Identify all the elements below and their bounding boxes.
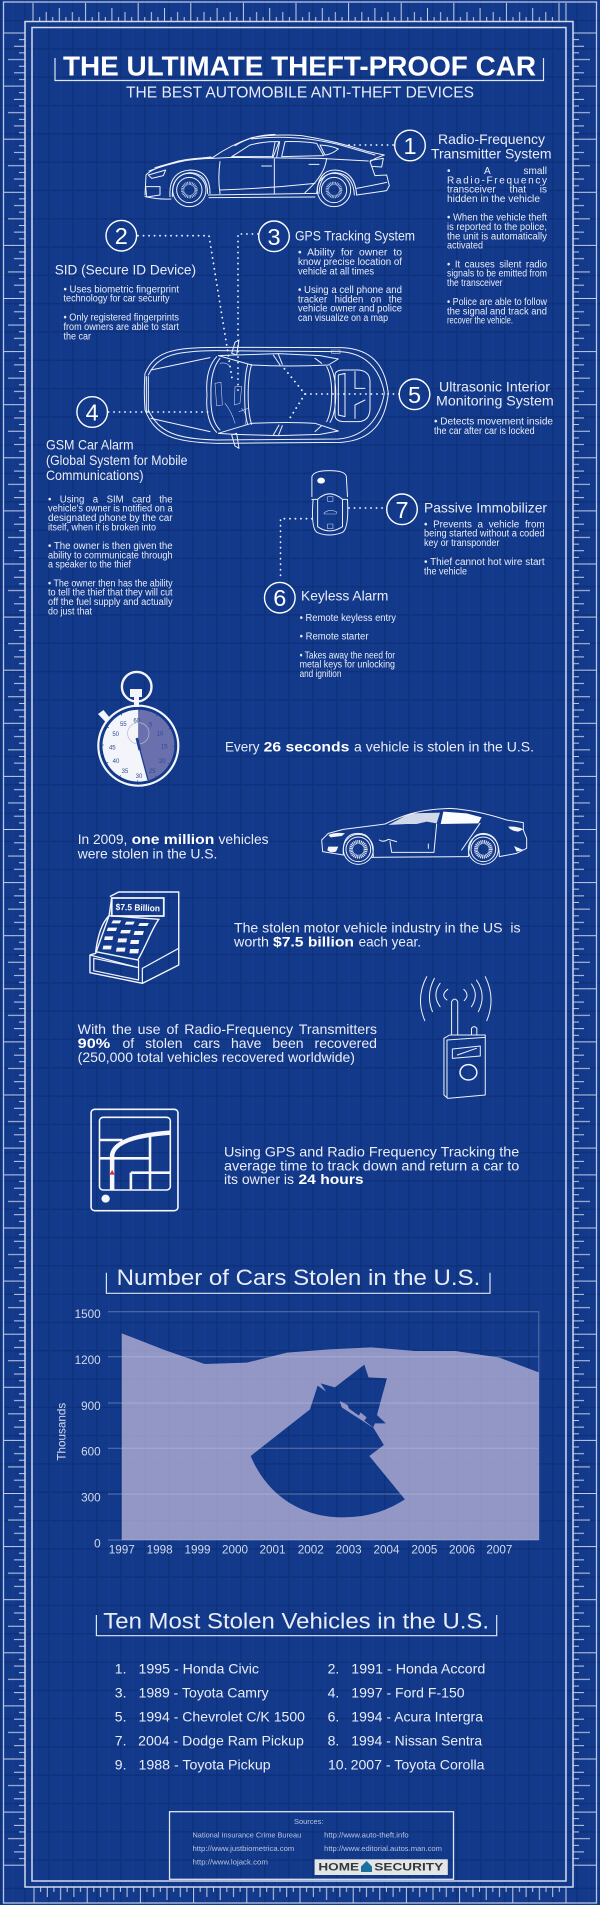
stat: 26 seconds: Every	[225, 739, 260, 755]
stat: one million vehicles: were stolen in the U.S.	[77, 845, 217, 861]
body text 3	[298, 248, 402, 324]
x axis labels: 2003	[336, 1543, 362, 1556]
sources text: http://www.auto-theft.info	[324, 1830, 409, 1839]
body text 1: the transceiver	[447, 278, 503, 289]
icon: stopwatch: 25	[149, 769, 156, 775]
y axis labels: 0	[94, 1537, 101, 1550]
body text 7: key or transponder	[424, 538, 500, 549]
list: ten most stolen vehicles: 7.	[115, 1732, 126, 1748]
body text 6: • Remote keyless entry	[300, 613, 396, 624]
y axis labels	[75, 1308, 101, 1550]
x axis labels: 1999	[184, 1543, 211, 1556]
body text 3: vehicle owner and police	[298, 304, 402, 315]
area chart: cars stolen	[56, 1308, 539, 1556]
body text 2	[64, 284, 179, 342]
heading 6: Keyless Alarm	[301, 588, 388, 604]
list: ten most stolen vehicles: 6.	[328, 1708, 339, 1724]
icon: sports car side view	[322, 808, 527, 864]
icon: stopwatch: 45	[109, 745, 116, 751]
gridlines	[108, 1312, 539, 1540]
callout 1: radio-frequency transmitter	[349, 130, 552, 327]
heading 4: GSM Car Alarm	[46, 436, 134, 452]
body text 4: to tell the thief that they will cut	[48, 588, 173, 599]
body text 1: small	[524, 166, 547, 177]
stat: 7.5 billion: each year.	[359, 934, 421, 950]
connector	[138, 236, 232, 378]
list: ten most stolen vehicles: 2004 - Dodge Ram Pickup	[138, 1732, 304, 1748]
body text 4: ability to communicate through	[48, 550, 173, 561]
heading 1	[431, 131, 552, 162]
body text 1: Radio-Frequency	[447, 175, 547, 186]
number badge 5	[399, 379, 430, 410]
stat: 24 hours: its owner is	[224, 1171, 294, 1187]
list: ten most stolen vehicles: 5.	[115, 1708, 126, 1724]
stat: 24 hours	[224, 1144, 520, 1187]
connector	[349, 144, 394, 146]
stat: 26 seconds: 26 seconds	[264, 739, 350, 755]
icon: stopwatch: 20	[159, 759, 166, 765]
body text 1: recover the vehicle.	[447, 316, 513, 327]
body text 2: • Uses biometric fingerprint	[64, 284, 179, 295]
body text 7: being started without a coded	[424, 529, 545, 540]
body text 4: • The owner is then given the	[48, 541, 173, 552]
stat: one million vehicles: In 2009,	[78, 831, 127, 847]
body text 4: do just that	[48, 606, 92, 617]
icon: stopwatch: 60	[133, 718, 141, 724]
logo: home security	[315, 1859, 448, 1875]
body text 2: • Only registered fingerprints	[64, 313, 179, 324]
icon: stopwatch: 55	[120, 722, 127, 728]
list: ten most stolen vehicles: 1997 - Ford F-150	[351, 1684, 465, 1700]
icon: stopwatch: 40	[113, 759, 120, 765]
number badge 4: 4	[86, 400, 99, 426]
title: THE ULTIMATE THEFT-PROOF CAR	[63, 50, 536, 82]
y axis labels: 600	[81, 1446, 101, 1459]
number badge 5: 5	[408, 382, 421, 408]
logo: home security: HOME	[318, 1862, 359, 1874]
sources text: http://www.editorial.autos.man.com	[324, 1844, 442, 1853]
body text 1: signals to be emitted from	[447, 269, 547, 280]
body text 7: the vehicle	[424, 566, 467, 577]
stat: 90 percent recovered	[78, 1021, 377, 1065]
number badge 6	[264, 582, 295, 613]
stat: 7.5 billion: $7.5 billion	[273, 934, 354, 950]
y axis title: Thousands	[56, 1403, 68, 1461]
connector	[280, 519, 312, 578]
icon: stopwatch: 30	[136, 774, 143, 780]
body text 3: • Ability for owner to	[298, 248, 402, 259]
list: ten most stolen vehicles: 4.	[328, 1684, 339, 1700]
heading 4	[46, 436, 188, 483]
heading 1: Transmitter System	[431, 146, 552, 162]
x axis labels: 2006	[449, 1543, 475, 1556]
heading 1: Radio-Frequency	[438, 131, 545, 147]
list: ten most stolen vehicles: 9.	[115, 1756, 126, 1772]
x axis labels	[109, 1543, 512, 1556]
stat: 90 percent recovered: of stolen cars have been recovered	[122, 1035, 377, 1051]
body text 4: vehicle's owner is notified on a	[48, 504, 173, 515]
stat: 24 hours: Using GPS and Radio Frequency Tracking the	[224, 1144, 520, 1160]
body text 1	[447, 166, 548, 327]
body text 4: itself, when it is broken into	[48, 522, 156, 533]
stat: 7.5 billion: worth	[233, 934, 269, 950]
number badge 3	[259, 221, 289, 252]
heading 2: SID (Secure ID Device)	[55, 261, 196, 277]
y axis labels: 1500	[75, 1308, 101, 1321]
body text 1: the unit is automatically	[447, 231, 547, 242]
list: ten most stolen vehicles: 1989 - Toyota Camry	[138, 1684, 269, 1700]
list: ten most stolen vehicles: 2007 - Toyota Corolla	[351, 1756, 485, 1772]
y axis labels: 900	[81, 1400, 101, 1413]
body text 4: designated phone by the car	[48, 513, 173, 524]
icon: stopwatch: 35	[122, 769, 129, 775]
stat: 7.5 billion	[233, 920, 520, 950]
sources text	[192, 1817, 442, 1866]
body text 3: • Using a cell phone and	[298, 285, 402, 296]
car side view illustration	[145, 134, 389, 207]
body text 4: a speaker to the thief	[48, 560, 131, 571]
body text 3: vehicle at all times	[298, 266, 374, 277]
body text 1: activated	[447, 241, 483, 252]
callout 5: ultrasonic interior monitoring	[283, 367, 554, 437]
icon: cash register	[90, 892, 179, 983]
connector	[238, 234, 258, 393]
number badge 1: 1	[403, 133, 417, 159]
list: ten most stolen vehicles: 10.	[328, 1756, 347, 1772]
body text 7: • Prevents a vehicle from	[424, 519, 545, 530]
callout 7: passive immobilizer	[349, 494, 547, 577]
body text 1: the signal and track and	[447, 306, 547, 317]
sources text: Sources:	[294, 1817, 323, 1826]
body text 2: technology for car security	[64, 294, 170, 305]
number badge 2	[106, 220, 137, 251]
sources text: National Insurance Crime Bureau	[192, 1830, 301, 1839]
list: ten most stolen vehicles: 1994 - Chevrolet C/K 1500	[138, 1708, 305, 1724]
x axis labels: 2005	[411, 1543, 438, 1556]
number badge 7: 7	[395, 497, 409, 523]
y axis labels: 1200	[75, 1354, 101, 1367]
heading 4: (Global System for Mobile	[46, 452, 188, 468]
list: ten most stolen vehicles: 1994 - Nissan Sentra	[351, 1732, 482, 1748]
body text 1: •	[447, 166, 451, 177]
body text 5: • Detects movement inside	[434, 417, 553, 428]
body text 6: and ignition	[300, 669, 341, 680]
subtitle: THE BEST AUTOMOBILE ANTI-THEFT DEVICES	[126, 85, 474, 102]
stolen-car area with thief silhouette	[122, 1333, 539, 1540]
stat: 24 hours: average time to track down and return a car to	[224, 1158, 520, 1174]
stat: 90 percent recovered: With the use of Radio-Frequency Transmitters	[78, 1021, 377, 1037]
list: ten most stolen vehicles: 8.	[328, 1732, 339, 1748]
body text 1: transceiver that is	[447, 185, 547, 196]
stat: one million vehicles: vehicles	[218, 831, 269, 847]
body text 6: metal keys for unlocking	[300, 660, 395, 671]
icon: radio transmitter	[420, 977, 491, 1098]
icon: stopwatch: 50	[112, 732, 120, 738]
heading 5: Monitoring System	[436, 393, 554, 409]
callout 6: keyless alarm	[264, 519, 396, 680]
stat: 90 percent recovered: 90%	[78, 1035, 111, 1051]
list: ten most stolen vehicles: 2.	[328, 1660, 339, 1676]
list: ten most stolen vehicles: 1988 - Toyota Pickup	[138, 1756, 271, 1772]
number badge 2: 2	[115, 223, 128, 249]
body text 1: • It causes silent radio	[447, 259, 547, 270]
stat: one million vehicles	[77, 831, 269, 861]
body text 7: • Thief cannot hot wire start	[424, 557, 545, 568]
body text 7	[424, 519, 545, 577]
number badge 1	[395, 130, 425, 161]
connector	[349, 507, 386, 509]
body text 4: off the fuel supply and actually	[48, 597, 173, 608]
heading 3: GPS Tracking System	[295, 228, 415, 244]
heading 5	[436, 379, 554, 409]
y axis labels: 300	[81, 1492, 101, 1505]
list: ten most stolen vehicles	[115, 1660, 485, 1772]
car top view illustration	[144, 340, 388, 448]
body text 2: the car	[64, 331, 92, 342]
callout 3: GPS tracking	[238, 221, 415, 393]
body text 2: from owners are able to start	[64, 322, 179, 333]
body text 1: • When the vehicle theft	[447, 213, 547, 224]
list: ten most stolen vehicles: 1991 - Honda Accord	[351, 1660, 485, 1676]
sources text: http://www.justbiometrica.com	[192, 1844, 294, 1853]
icon: cash register: $7.5 Billion	[115, 902, 160, 913]
icon: stopwatch: 10	[157, 731, 164, 737]
number badge 3: 3	[267, 224, 281, 250]
x axis labels: 2001	[259, 1543, 286, 1556]
connector	[283, 367, 399, 418]
body text 6: • Remote starter	[300, 632, 369, 643]
callout 2: SID	[55, 220, 232, 378]
number badge 6: 6	[273, 585, 286, 611]
body text 1: A	[484, 166, 491, 177]
icon: car key fob	[312, 471, 348, 535]
list: ten most stolen vehicles: 3.	[115, 1684, 126, 1700]
stat: one million vehicles: one million	[132, 831, 214, 847]
icon: stopwatch	[98, 672, 178, 786]
x axis labels: 1998	[147, 1543, 173, 1556]
callout 4: GSM car alarm	[46, 397, 211, 617]
stat: 24 hours: 24 hours	[298, 1171, 364, 1187]
body text 5	[434, 417, 553, 437]
body text 3: know precise location of	[298, 257, 402, 268]
connector	[108, 411, 211, 413]
stat: 26 seconds: a vehicle is stolen in the U.S.	[354, 739, 534, 755]
logo: home security: SECURITY	[374, 1862, 444, 1874]
body text 1: is reported to the police,	[447, 222, 547, 233]
x axis labels: 2007	[486, 1543, 512, 1556]
heading: chart title: Number of Cars Stolen in the U.S.	[117, 1265, 480, 1290]
body text 1: hidden in the vehicle	[447, 194, 540, 205]
heading: most stolen vehicles: Ten Most Stolen Vehicles in the U.S.	[103, 1608, 489, 1633]
heading 7: Passive Immobilizer	[424, 500, 547, 516]
body text 3: tracker hidden on the	[298, 294, 402, 305]
body text 4	[48, 494, 173, 617]
sources text: http://www.lojack.com	[192, 1857, 268, 1866]
stat: 7.5 billion: The stolen motor vehicle industry in the US is	[234, 920, 520, 936]
body text 4: • The owner then has the ability	[48, 578, 173, 589]
stat: 26 seconds	[225, 739, 534, 755]
body text 6: • Takes away the need for	[300, 650, 396, 661]
list: ten most stolen vehicles: 1.	[115, 1660, 126, 1676]
body text 6	[300, 613, 396, 680]
body text 5: the car after car is locked	[434, 426, 535, 437]
list: ten most stolen vehicles: 1994 - Acura Intergra	[351, 1708, 483, 1724]
stat: 90 percent recovered: (250,000 total vehicles recovered worldwide)	[78, 1049, 355, 1065]
icon: stopwatch: 5	[149, 722, 153, 728]
panel: sources	[170, 1812, 454, 1879]
number badge 4	[77, 397, 107, 427]
heading 4: Communications)	[46, 467, 144, 483]
x axis labels: 2004	[373, 1543, 400, 1556]
heading 5: Ultrasonic Interior	[439, 379, 550, 395]
number badge 7	[387, 494, 417, 525]
x axis labels: 1997	[109, 1543, 135, 1556]
body text 3: can visualize on a map	[298, 313, 388, 324]
list: ten most stolen vehicles: 1995 - Honda Civic	[138, 1660, 259, 1676]
x axis labels: 2002	[298, 1543, 324, 1556]
body text 1: • Police are able to follow	[447, 297, 548, 308]
body text 4: • Using a SIM card the	[48, 494, 173, 505]
icon: GPS map device	[91, 1109, 178, 1211]
x axis labels: 2000	[222, 1543, 248, 1556]
icon: stopwatch: 15	[161, 745, 168, 751]
